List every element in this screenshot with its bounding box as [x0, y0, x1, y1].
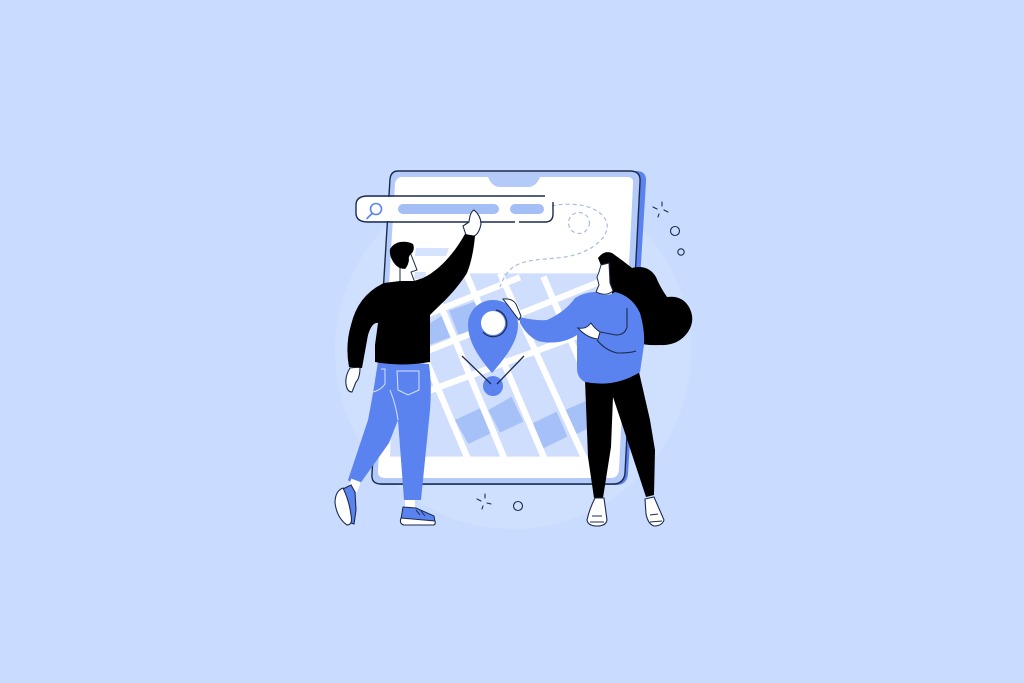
tablet — [372, 171, 646, 485]
man — [335, 210, 481, 525]
woman — [503, 252, 692, 526]
man: raised hand — [463, 210, 481, 236]
man: front shoe — [400, 500, 435, 525]
decoration: sparkle top right — [653, 202, 684, 255]
woman: open hand — [578, 323, 600, 339]
woman: face and neck — [596, 263, 613, 294]
faint blocks behind the man — [414, 248, 449, 279]
decoration: sparkle bottom — [477, 494, 522, 510]
icon: magnifier — [367, 204, 382, 218]
woman: blue sweater — [520, 292, 644, 384]
search button placeholder — [510, 204, 544, 214]
woman: leggings — [585, 372, 655, 498]
search bar — [356, 196, 553, 222]
darker map blocks — [427, 302, 588, 448]
man: back shoe — [335, 479, 361, 525]
woman: right shoe — [645, 497, 664, 526]
woman: hair — [598, 252, 692, 345]
location pin — [462, 300, 524, 396]
woman: hand on pin — [503, 299, 521, 320]
background circle — [335, 173, 691, 529]
map roads — [417, 273, 607, 460]
search text placeholder — [398, 204, 499, 214]
woman: left shoe — [587, 498, 607, 526]
man: face and neck — [400, 252, 417, 283]
illustration: two people with a map on a tablet — [334, 170, 692, 526]
man: jeans — [348, 361, 431, 500]
dashed route — [500, 204, 607, 287]
man: hair — [390, 242, 414, 269]
man: lower hand — [346, 367, 360, 392]
man: black sweater — [347, 234, 475, 368]
map — [380, 273, 607, 460]
